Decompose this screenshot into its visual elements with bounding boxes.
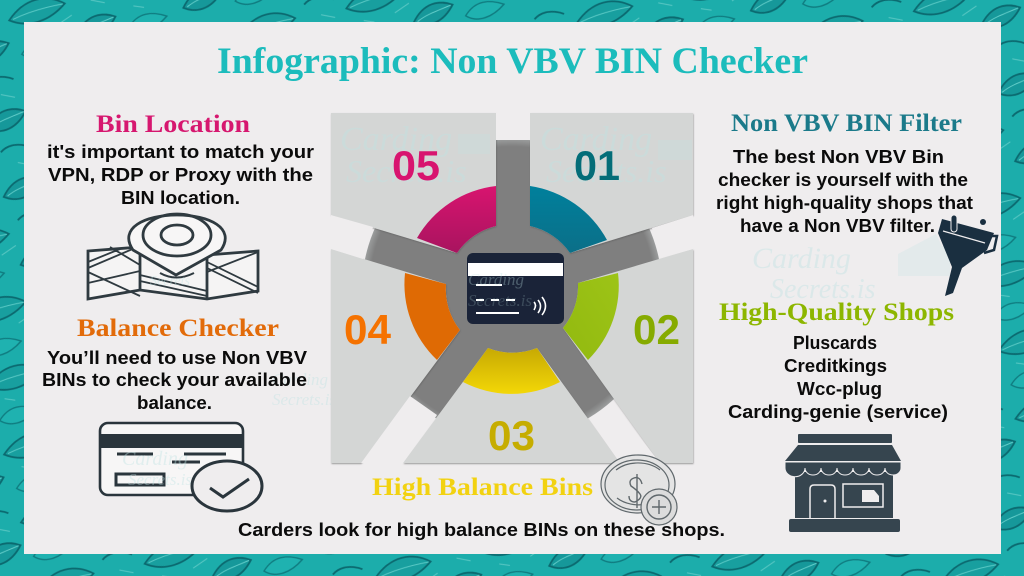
shop list <box>728 332 948 422</box>
light gaps between arms <box>652 215 693 258</box>
panel: Non VBV BIN Filter <box>716 110 997 296</box>
watermarks: Carding <box>752 242 851 275</box>
icon: card with check mark: Secrets.is <box>128 470 192 489</box>
text block: The best Non VBV Bin <box>733 146 944 167</box>
panel: Bin Location <box>47 111 315 299</box>
text block: checker is yourself with the <box>718 169 968 190</box>
panel watermarks: Carding <box>540 121 652 158</box>
text block <box>42 347 307 413</box>
segment panel 04 <box>331 249 460 463</box>
grey hub disc <box>362 139 662 439</box>
icon: credit card <box>467 253 564 324</box>
ring segment 05 <box>417 186 496 253</box>
text block: BIN location. <box>121 187 240 208</box>
icon: funnel <box>938 215 997 296</box>
text block: it's important to match your <box>47 141 315 162</box>
watermarks: Carding <box>272 370 328 389</box>
segment panel 01 <box>530 113 693 253</box>
icon: card with check mark: Carding <box>122 448 188 470</box>
shop list: Creditkings <box>784 355 887 376</box>
panel watermarks: Carding <box>340 121 452 158</box>
text block: VPN, RDP or Proxy with the <box>48 164 313 185</box>
icon: storefront <box>785 434 901 532</box>
watermarks <box>272 234 950 409</box>
text block <box>47 141 315 208</box>
ring segment 04 <box>404 273 460 360</box>
number 04: 04 <box>344 306 392 353</box>
ring segment 02 <box>563 273 619 360</box>
text block: right high-quality shops that <box>716 192 974 213</box>
heading: High-Quality Shops <box>719 299 954 326</box>
shop list: Pluscards <box>793 332 877 353</box>
heading: Bin Location <box>96 111 250 138</box>
text block: You’ll need to use Non VBV <box>47 347 307 368</box>
heading: Balance Checker <box>77 315 279 342</box>
watermarks: Secrets.is <box>770 274 876 305</box>
segment panel 03 <box>403 348 620 463</box>
ring segment 03 <box>463 348 560 394</box>
panel watermarks <box>340 121 692 189</box>
text block: BINs to check your available <box>42 369 307 390</box>
panel watermarks: Secrets.is <box>546 153 667 189</box>
icon: credit card: Carding <box>468 270 524 289</box>
heading: Non VBV BIN Filter <box>731 110 962 137</box>
segment panel 05 <box>331 113 496 253</box>
number 01: 01 <box>574 142 620 189</box>
panel: High Balance Bins <box>238 455 725 540</box>
text block: balance. <box>137 392 212 413</box>
text block: have a Non VBV filter. <box>740 215 935 236</box>
number 03: 03 <box>488 412 535 459</box>
icon: card with check mark <box>100 423 262 511</box>
icon: credit card: Secrets.is <box>468 291 532 310</box>
text block <box>716 146 974 236</box>
icon: map with pin <box>88 214 258 299</box>
watermarks: Secrets.is <box>272 390 336 409</box>
number 02: 02 <box>633 306 680 353</box>
ring segment 01 <box>530 186 607 253</box>
central five-arm hub diagram <box>331 113 693 463</box>
segment panel 02 <box>563 249 693 463</box>
panel: Balance Checker <box>42 315 307 511</box>
shop list: Carding-genie (service) <box>728 401 948 422</box>
panel: High-Quality Shops <box>719 299 954 532</box>
icon: map with pin: Secrets <box>150 274 190 289</box>
title: Infographic: Non VBV BIN Checker <box>217 40 808 81</box>
number 05: 05 <box>392 142 440 189</box>
icon: coin with plus <box>601 455 677 525</box>
heading: High Balance Bins <box>372 474 593 501</box>
shop list: Wcc-plug <box>797 378 882 399</box>
panel watermarks: Secrets.is <box>346 153 467 189</box>
description: Carders look for high balance BINs on these shops. <box>238 519 725 540</box>
